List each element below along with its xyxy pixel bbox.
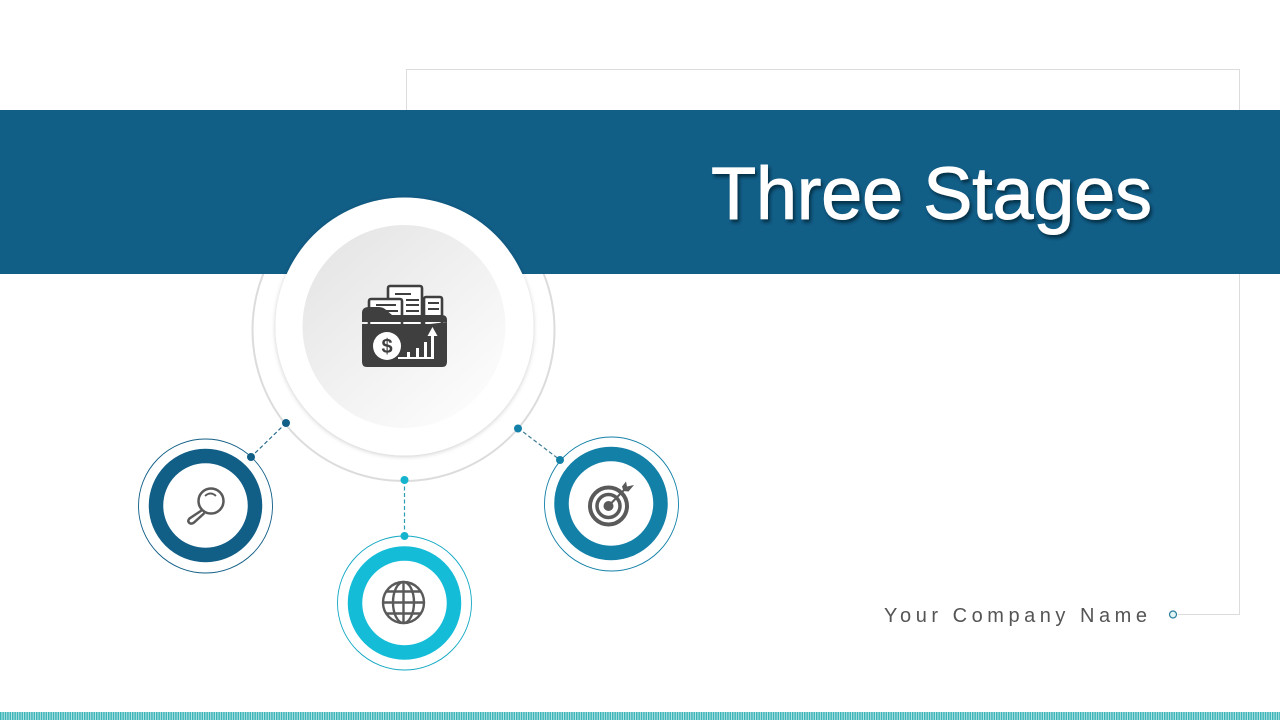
folder body <box>362 307 447 322</box>
connector: left <box>251 419 290 457</box>
stage circle: target <box>544 437 678 571</box>
back documents <box>369 286 442 327</box>
connector: middle <box>400 476 408 536</box>
icon: magnifying glass <box>188 488 224 524</box>
icon: globe <box>383 582 424 623</box>
icon: target with arrow <box>590 482 634 524</box>
connector: right <box>514 424 560 460</box>
icon: finance folder <box>362 286 447 367</box>
outer ring around main circle <box>252 179 554 481</box>
icon: finance folder: $ <box>381 336 393 358</box>
bottom stripe <box>0 712 1280 720</box>
outline frame <box>406 70 1240 614</box>
frame end marker <box>1170 611 1176 618</box>
title: Three Stages <box>711 152 1152 235</box>
company name: Your Company Name <box>884 605 1147 627</box>
stage circle: globe <box>338 532 472 670</box>
title banner <box>0 110 1280 274</box>
dollar badge <box>373 332 401 360</box>
rising bars with arrow <box>398 327 438 359</box>
main circle <box>276 198 534 456</box>
stage circle: search <box>138 439 272 573</box>
